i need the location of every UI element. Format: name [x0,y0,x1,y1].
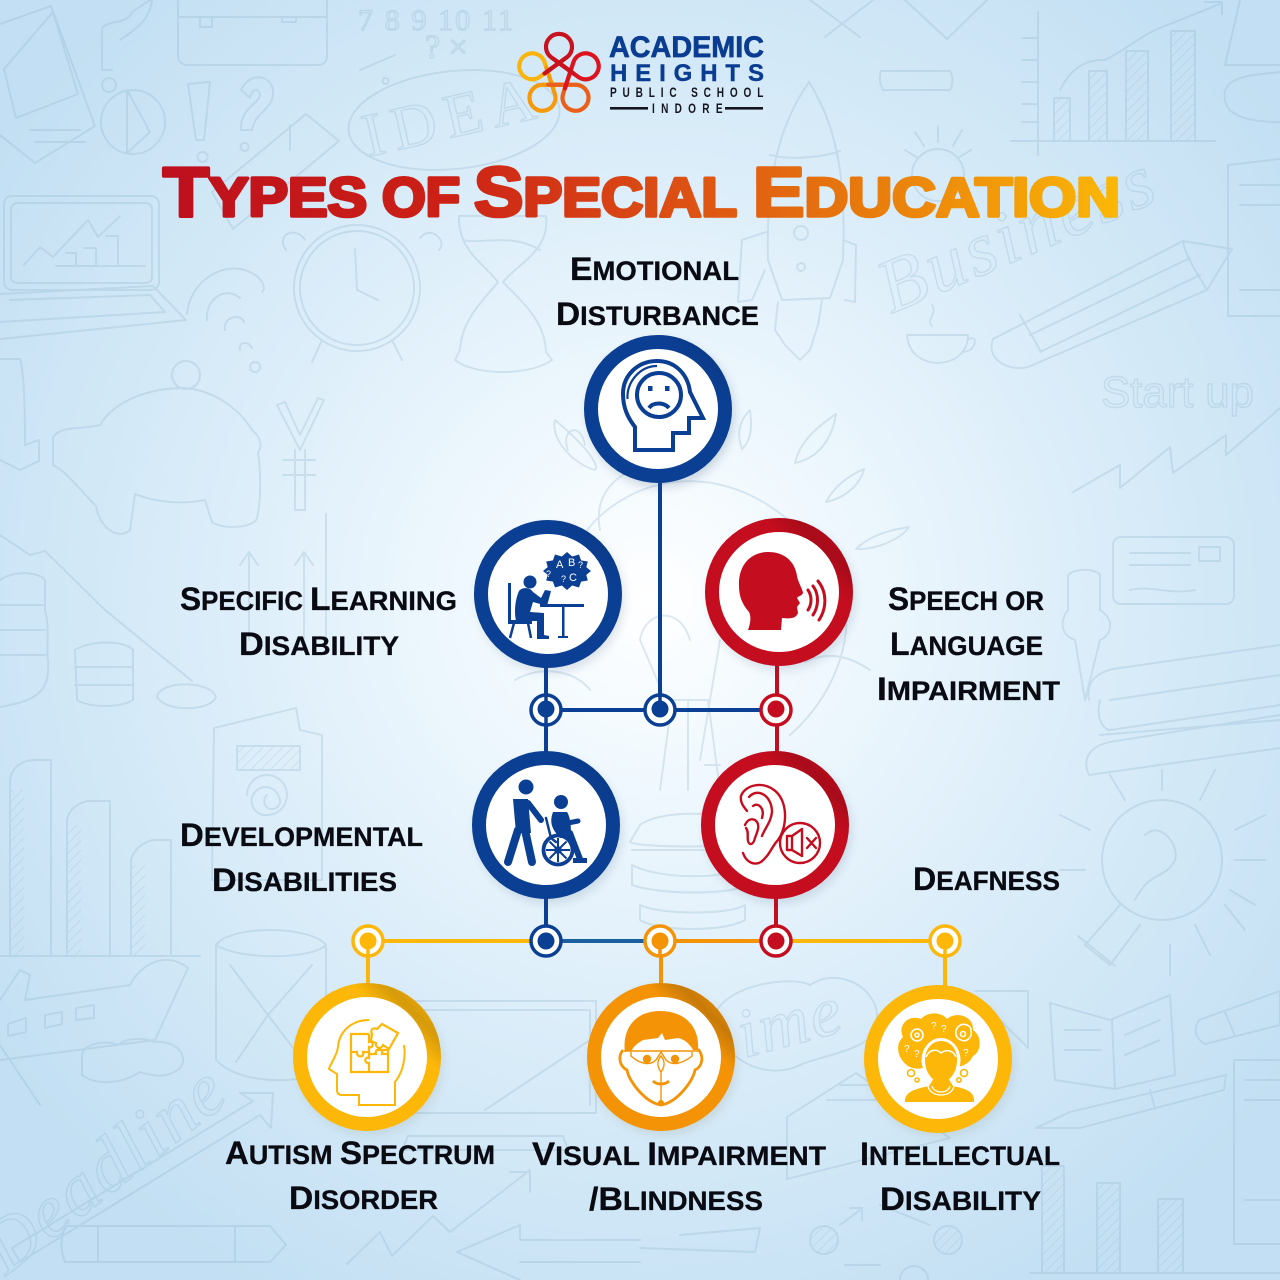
panel: developmental disabilities [180,757,622,903]
logo mark: five loops [515,34,603,117]
connector lines [368,470,945,990]
label: specific learning disability: SPECIFIC [180,581,303,617]
thought question marks: ? [931,1021,937,1032]
school name [609,31,764,116]
label: intellectual disability: INTELLECTUAL [860,1136,1060,1172]
label: autism spectrum disorder: DISORDER [289,1180,438,1216]
burst letters: A [556,559,564,571]
panel: visual impairment / blindness [532,989,826,1217]
label: specific learning disability: LEARNING [310,581,457,617]
label: emotional disturbance [556,251,759,332]
label: intellectual disability: DISABILITY [880,1181,1041,1217]
icon: face with glasses [620,1011,702,1106]
panel: speech or language impairment [709,524,1060,707]
logo [515,31,764,117]
connector nodes [353,695,960,956]
icon: wheelchair helper [508,780,587,864]
label: deafness: DEAFNESS [913,861,1060,897]
panel: specific learning disability: ? [561,574,566,584]
label: intellectual disability [860,1136,1060,1217]
panel: autism spectrum disorder [225,989,495,1216]
label: developmental disabilities: DEVELOPMENTAL [180,817,423,853]
school name: INDORE [652,100,723,116]
label: visual impairment / blindness [532,1136,826,1217]
label: specific learning disability [180,581,457,662]
panel: specific learning disability: ? [578,560,583,570]
label: visual impairment / blindness: /BLINDNESS [589,1181,763,1217]
school name: HEIGHTS [610,60,764,87]
label: visual impairment / blindness: VISUAL IMPAIRMENT [532,1136,826,1172]
title [163,153,1120,231]
icon: person with thought cloud: ? [963,1048,969,1059]
panel: intellectual disability [860,991,1060,1217]
background doodles: ? × [425,29,468,66]
label: emotional disturbance: DISTURBANCE [556,296,759,332]
background doodles: Business [865,138,1166,330]
background doodles: ime [728,972,850,1073]
icon: speaking head [739,552,825,630]
background doodles: IDEA [356,65,542,171]
panel: deafness [705,757,1060,903]
icon: person with thought cloud [898,1013,980,1102]
label: speech or language impairment: IMPAIRMENT [877,671,1060,707]
panel: emotional disturbance [556,251,759,487]
title: OF [382,166,460,228]
label: specific learning disability: DISABILITY [239,626,399,662]
icon: student at desk [508,552,591,639]
icon: ear with muted speaker [741,785,820,864]
school name: PUBLIC SCHOOL [610,84,764,100]
school name: ACADEMIC [609,31,764,64]
panel: specific learning disability: B [568,557,575,569]
title: EDUCATION [753,153,1120,231]
label: emotional disturbance: EMOTIONAL [570,251,739,287]
label: developmental disabilities [180,817,423,898]
title: TYPES [163,153,367,231]
label: developmental disabilities: DISABILITIES [212,862,397,898]
label: speech or language impairment: LANGUAGE [890,626,1043,662]
title: SPECIAL [474,153,737,231]
icon: person with thought cloud: ? [904,1044,910,1055]
icon: sad face in head [623,361,703,450]
icon: person with thought cloud: ? [914,1049,920,1060]
icon: person with thought cloud: ? [941,1024,947,1035]
label: speech or language impairment [877,581,1060,707]
label: speech or language impairment: SPEECH OR [888,581,1044,617]
background doodles: 7 8 9 10 11 [358,4,513,37]
label: autism spectrum disorder: AUTISM SPECTRUM [225,1135,495,1171]
background doodles: Start up [1101,368,1254,417]
panel: specific learning disability: ? [546,569,551,579]
icon: head with puzzle [329,1020,405,1105]
panel: specific learning disability: C [569,572,577,584]
panel: specific learning disability [180,526,624,672]
label: autism spectrum disorder [225,1135,495,1216]
